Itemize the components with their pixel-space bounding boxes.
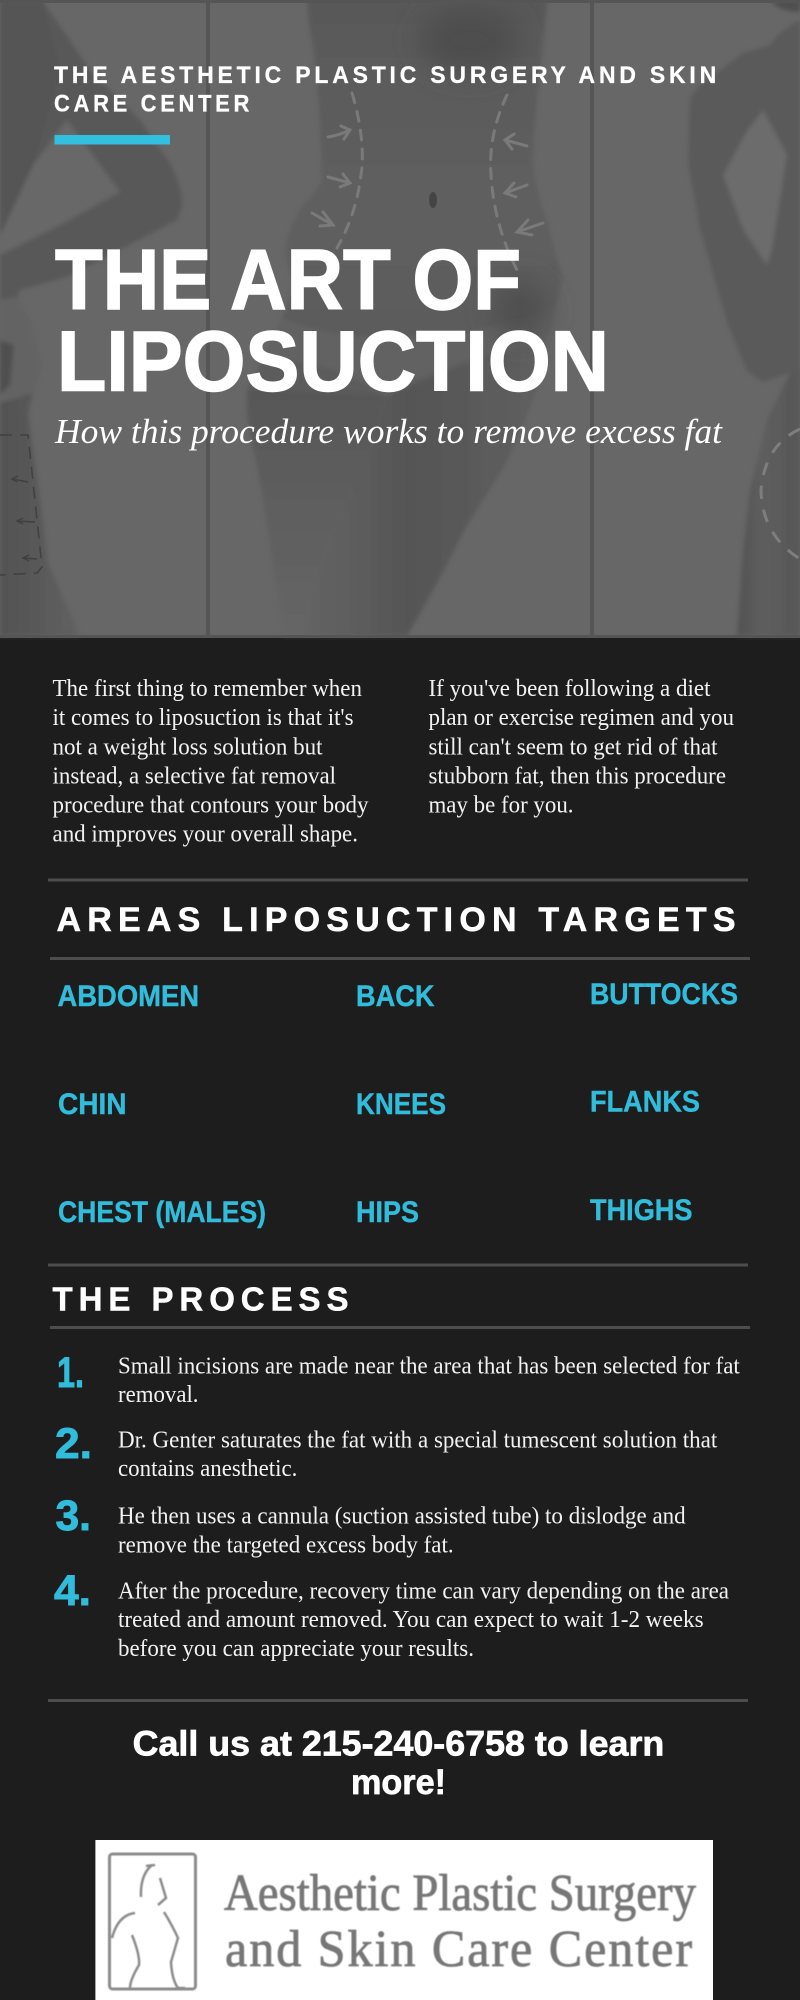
target areas list: CHIN [58,1088,126,1121]
target areas list: HIPS [356,1196,419,1229]
navel [429,192,437,208]
logo wordmark: Aesthetic Plastic Surgery [224,1865,696,1922]
intro text: right column: may be for you. [428,792,574,818]
logo emblem [110,1854,196,1989]
hero photo background [0,0,800,638]
photo panel dividers [0,0,800,638]
intro text: right column [428,676,734,818]
dashed box on the left thigh [0,435,42,575]
target areas list: KNEES [356,1088,446,1121]
intro text: left column [52,676,368,848]
intro text: left column: and improves your overall shape. [52,822,358,848]
step 3: He then uses a cannula (suction assisted tube) to dislodge and [118,1503,686,1529]
organisation name [54,62,720,118]
step 4: before you can appreciate your results. [118,1636,474,1662]
subtitle: How this procedure works to remove excess fat [54,412,723,451]
step 3: remove the targeted excess body fat. [118,1532,454,1558]
intro text: right column: stubborn fat, then this procedure [428,763,726,789]
intro text: right column: If you've been following a diet [428,676,711,702]
accent bar [54,135,170,144]
step 1 [57,1349,740,1408]
heading: the process: THE PROCESS [52,1280,348,1318]
step 3: 3. [56,1492,91,1540]
organisation name: THE AESTHETIC PLASTIC SURGERY AND SKIN [54,62,720,89]
logo wordmark: and Skin Care Center [225,1921,694,1978]
call to action: more! [351,1763,446,1802]
step 4: After the procedure, recovery time can vary depending on the area [118,1578,729,1604]
logo background [95,1840,713,2000]
step 2: contains anesthetic. [118,1456,297,1482]
step 4: treated and amount removed. You can expect to wait 1-2 weeks [118,1607,704,1633]
logo wordmark [224,1865,696,1978]
title: THE ART OF [55,233,521,328]
intro text: left column: procedure that contours your body [52,792,368,818]
target areas list: BACK [356,980,435,1013]
call to action: Call us at 215-240-6758 to learn [133,1724,664,1764]
intro text: left column: instead, a selective fat removal [52,763,336,789]
title: LIPOSUCTION [57,314,609,410]
panel: hero [0,0,800,638]
intro text: right column: still can't seem to get rid of that [428,734,718,760]
small arrows on the left thigh [12,476,37,561]
intro text: left column: The first thing to remember when [52,676,362,702]
step 2 [55,1420,718,1482]
call to action [133,1724,664,1802]
title [55,233,609,410]
step 3 [56,1492,686,1558]
target areas list: BUTTOCKS [590,978,738,1011]
target areas list [58,978,738,1229]
markings on the abdomen [312,93,543,270]
target areas list: THIGHS [590,1194,692,1227]
intro text: left column: it comes to liposuction is that it's [52,705,354,731]
step 1: Small incisions are made near the area that has been selected for fat [118,1353,740,1379]
intro text: left column: not a weight loss solution but [52,734,323,760]
heading: areas liposuction targets: AREAS LIPOSUCTION TARGETS [56,901,736,939]
target areas list: FLANKS [590,1086,700,1118]
logo [95,1840,713,2000]
step 1: 1. [57,1349,84,1397]
step 2: Dr. Genter saturates the fat with a special tumescent solution that [118,1428,718,1454]
step 4: 4. [54,1567,91,1615]
step 4 [54,1567,729,1662]
organisation name: CARE CENTER [54,90,253,118]
step 1: removal. [118,1382,198,1408]
step 2: 2. [55,1420,92,1468]
target areas list: CHEST (MALES) [58,1196,266,1229]
target areas list: ABDOMEN [58,980,199,1013]
dashed marking on the right hip [761,429,800,559]
intro text: right column: plan or exercise regimen and you [428,705,734,731]
